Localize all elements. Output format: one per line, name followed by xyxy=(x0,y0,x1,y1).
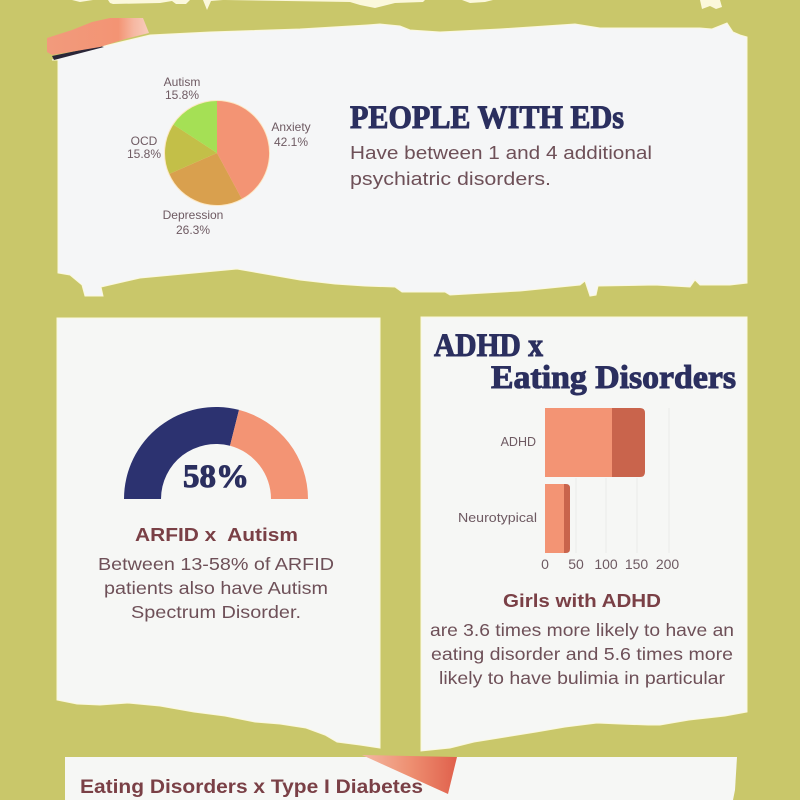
text: additional disorders: psychiatric disorders. xyxy=(350,169,551,189)
axis labels: 0 xyxy=(541,556,549,572)
slice: autism xyxy=(174,101,217,153)
pie label: anxiety: 42.1% xyxy=(274,135,308,149)
text: ARFID description: Between 13-58% of ARFID xyxy=(98,554,334,574)
heading: people with EDs: PEOPLE WITH EDs xyxy=(350,100,624,136)
pie label: autism: Autism xyxy=(164,75,200,89)
bar: neurotypical xyxy=(545,484,570,553)
slice: OCD xyxy=(165,125,217,174)
pie label: OCD: 15.8% xyxy=(127,147,161,161)
torn paper sheet xyxy=(52,23,747,296)
text: ADHD description: are 3.6 times more likely to have an xyxy=(430,620,734,640)
pie label: depression: Depression xyxy=(163,208,223,222)
text: ADHD description: eating disorder and 5.6 times more xyxy=(431,644,733,664)
panel: people with EDs xyxy=(47,18,747,296)
category label: neurotypical: Neurotypical xyxy=(458,511,537,525)
heading: eating disorders: Eating Disorders xyxy=(491,360,736,396)
tape: peach with dark line xyxy=(47,18,149,60)
paper sheet xyxy=(421,317,747,751)
panel: ADHD x eating disorders xyxy=(421,317,747,751)
gauge value: 58% xyxy=(183,459,249,495)
gauge: navy arc xyxy=(124,407,239,499)
axis labels: 200 xyxy=(656,556,679,572)
pie label: OCD: OCD xyxy=(131,134,158,148)
slice: anxiety xyxy=(217,101,269,199)
gauge: peach arc xyxy=(230,410,308,499)
pie label: autism: 15.8% xyxy=(165,88,199,102)
text: additional disorders: Have between 1 and 4 additional xyxy=(350,143,652,163)
tape: peach triangle xyxy=(362,755,457,794)
torn paper strip at top xyxy=(72,0,722,10)
heading: girls with ADHD: Girls with ADHD xyxy=(503,591,661,611)
pie chart xyxy=(164,100,270,206)
axis labels: 100 xyxy=(594,556,618,572)
paper sheet xyxy=(65,757,737,800)
bar chart xyxy=(458,408,679,572)
heading: ARFID x autism: ARFID x Autism xyxy=(135,525,298,545)
paper sheet xyxy=(57,318,380,748)
slice: depression xyxy=(169,153,242,205)
axis labels: 150 xyxy=(625,556,648,572)
axis labels: 50 xyxy=(568,556,584,572)
gauge chart xyxy=(124,407,308,499)
text: ARFID description: patients also have Autism xyxy=(104,578,328,598)
panel: ARFID x autism xyxy=(57,318,380,748)
text: ADHD description: likely to have bulimia in particular xyxy=(439,668,725,688)
heading: diabetes: Eating Disorders x Type I Diabetes xyxy=(80,777,423,798)
pie label: anxiety: Anxiety xyxy=(271,120,311,134)
bar: ADHD xyxy=(545,408,645,477)
heading: ADHD x: ADHD x xyxy=(434,328,543,364)
panel: eating disorders x type I diabetes xyxy=(65,755,737,800)
text: ARFID description: Spectrum Disorder. xyxy=(131,602,301,622)
pie label: depression: 26.3% xyxy=(176,223,210,237)
category label: ADHD: ADHD xyxy=(501,435,536,449)
